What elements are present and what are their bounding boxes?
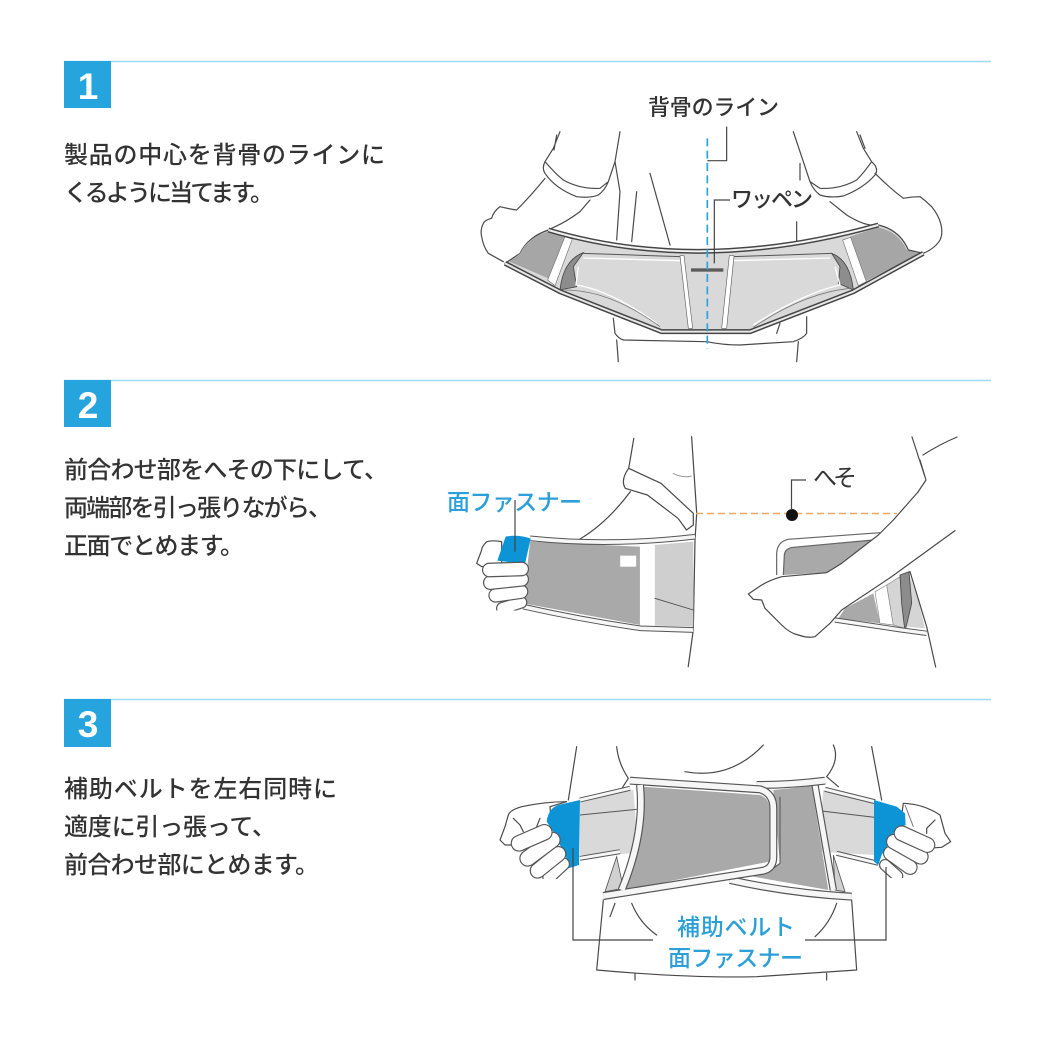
step 2 instructions: 正面でとめます。 [64, 533, 244, 560]
rear belt [605, 781, 852, 897]
body and sleeve [579, 437, 697, 667]
leaders [573, 848, 886, 940]
front flap [603, 781, 780, 896]
panel: step 1 [64, 61, 991, 362]
label: fastener: 面ファスナー [668, 945, 803, 971]
step 2 instructions: 前合わせ部をへその下にして、 [64, 457, 388, 484]
navel marker [786, 509, 798, 521]
step 1 number badge: 1 [78, 66, 98, 107]
label: hook and loop fastener: 面ファスナー [447, 489, 582, 515]
blue tab [547, 800, 580, 868]
step 2 number badge: 2 [78, 385, 98, 426]
step 3 instructions: 前合わせ部にとめます。 [64, 852, 319, 879]
label: spine line: 背骨のライン [648, 95, 779, 120]
illustration: right view, hand bringing the belt to the front [748, 437, 957, 667]
illustration: belt placed on the back [481, 127, 942, 362]
panel: step 3 [64, 699, 991, 980]
label: navel: へそ [813, 465, 857, 492]
step 2 instructions [64, 457, 388, 560]
step 1 number badge [64, 61, 111, 108]
fist holding the hook and loop patch [477, 500, 531, 608]
leader [513, 500, 517, 552]
arm and hand [748, 492, 955, 637]
step 1 instructions: 製品の中心を背骨のラインに [64, 142, 385, 169]
step 1 instructions [64, 142, 385, 207]
left hand with blue tab [500, 800, 580, 877]
body outline [568, 745, 882, 980]
step 3 number badge: 3 [78, 704, 98, 745]
rear belt folds [835, 572, 927, 633]
step 3 instructions [64, 776, 337, 879]
navel line, dashed [696, 512, 897, 514]
step 3 number badge [64, 699, 111, 747]
spine line, dashed [705, 138, 710, 348]
label: patch: ワッペン [731, 187, 813, 212]
body outline [910, 437, 957, 667]
belt [523, 537, 695, 630]
step 2 number badge [64, 380, 111, 427]
panel: step 2 [64, 380, 991, 667]
step 3 instructions: 補助ベルトを左右同時に [64, 776, 337, 803]
step 2 instructions: 両端部を引っ張りながら、 [64, 495, 332, 522]
hook and loop patch [497, 536, 531, 564]
side belts [580, 788, 878, 863]
step 3 instructions: 適度に引っ張って、 [64, 814, 276, 841]
leaders [707, 127, 730, 263]
right hand with blue tab [874, 800, 951, 876]
front belt end [777, 533, 880, 575]
step 1 instructions: くるように当てます。 [64, 180, 274, 207]
back support belt [505, 225, 923, 332]
label: auxiliary belt: 補助ベルト [677, 914, 795, 940]
body and arms [481, 132, 942, 362]
illustration: left view, belt pulled around the body [523, 437, 697, 667]
navel leader [792, 480, 806, 510]
illustration: pulling the auxiliary belts [568, 745, 882, 980]
blue tab [874, 800, 906, 865]
